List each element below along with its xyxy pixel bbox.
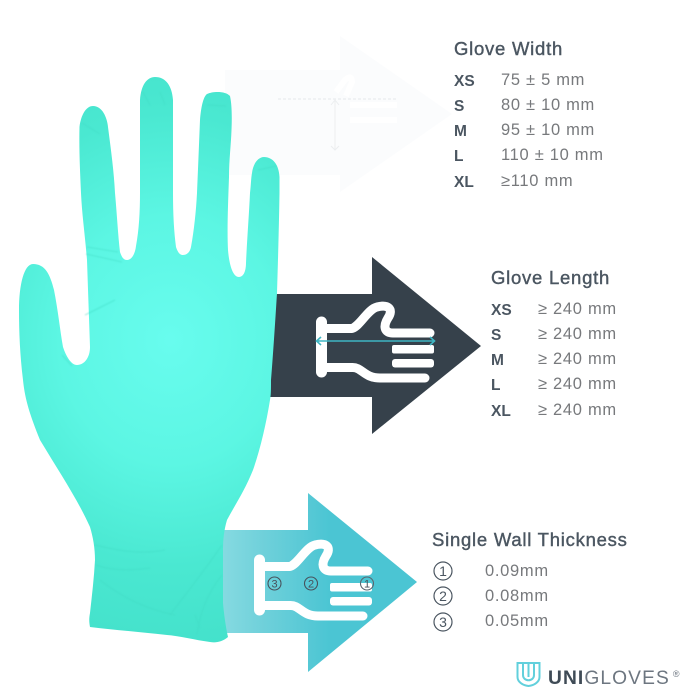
rows: width sizes: XL: [454, 174, 474, 191]
rows: length sizes: S: [491, 327, 501, 344]
panel: glove length: [491, 267, 617, 420]
logo: unigloves: [516, 662, 680, 689]
rows: width sizes: ≥110 mm: [501, 172, 573, 190]
rows: width sizes: L: [454, 148, 463, 165]
icon: hand outline: [316, 306, 434, 378]
rows: thickness values: 0.09mm: [485, 562, 549, 580]
heading: glove length: Glove Length: [491, 267, 610, 288]
arrow: wall thickness: 2: [308, 578, 314, 590]
rows: length sizes: L: [491, 377, 500, 394]
rows: thickness values: 2: [439, 588, 447, 604]
rows: width sizes: [454, 71, 604, 191]
heading: single wall thickness: Single Wall Thickness: [432, 529, 628, 550]
rows: width sizes: XS: [454, 73, 475, 90]
arrow: wall thickness: 1: [364, 578, 370, 590]
icon: hand outline with measuring points: [259, 544, 372, 616]
rows: width sizes: 95 ± 10 mm: [501, 121, 595, 139]
heading: glove width: Glove Width: [454, 38, 563, 59]
arrow: glove width (faint): [225, 36, 452, 192]
rows: thickness values: 0.05mm: [485, 612, 549, 630]
rows: thickness values: 3: [439, 614, 447, 630]
panel: single wall thickness: [432, 529, 628, 632]
rows: thickness values: [433, 561, 549, 632]
rows: width sizes: S: [454, 98, 464, 115]
glove: [19, 77, 280, 642]
arrow: wall thickness: [222, 493, 417, 672]
rows: length sizes: M: [491, 352, 504, 369]
rows: length sizes: ≥ 240 mm: [538, 375, 617, 393]
icon: shield U: [516, 662, 540, 687]
rows: thickness values: 0.08mm: [485, 587, 549, 605]
arrow: glove length: [262, 257, 481, 434]
panel: glove width: [454, 38, 604, 191]
rows: length sizes: XS: [491, 302, 512, 319]
rows: width sizes: 80 ± 10 mm: [501, 96, 595, 114]
rows: width sizes: 75 ± 5 mm: [501, 71, 585, 89]
rows: length sizes: ≥ 240 mm: [538, 401, 617, 419]
rows: width sizes: M: [454, 123, 467, 140]
rows: length sizes: ≥ 240 mm: [538, 325, 617, 343]
rows: length sizes: XL: [491, 403, 511, 420]
rows: width sizes: 110 ± 10 mm: [501, 146, 604, 164]
rows: length sizes: ≥ 240 mm: [538, 350, 617, 368]
wordmark: UNIGLOVES ®: [548, 668, 680, 689]
rows: length sizes: ≥ 240 mm: [538, 300, 617, 318]
rows: thickness values: 1: [439, 563, 447, 579]
rows: length sizes: [491, 300, 617, 420]
arrow: wall thickness: 3: [271, 578, 278, 590]
